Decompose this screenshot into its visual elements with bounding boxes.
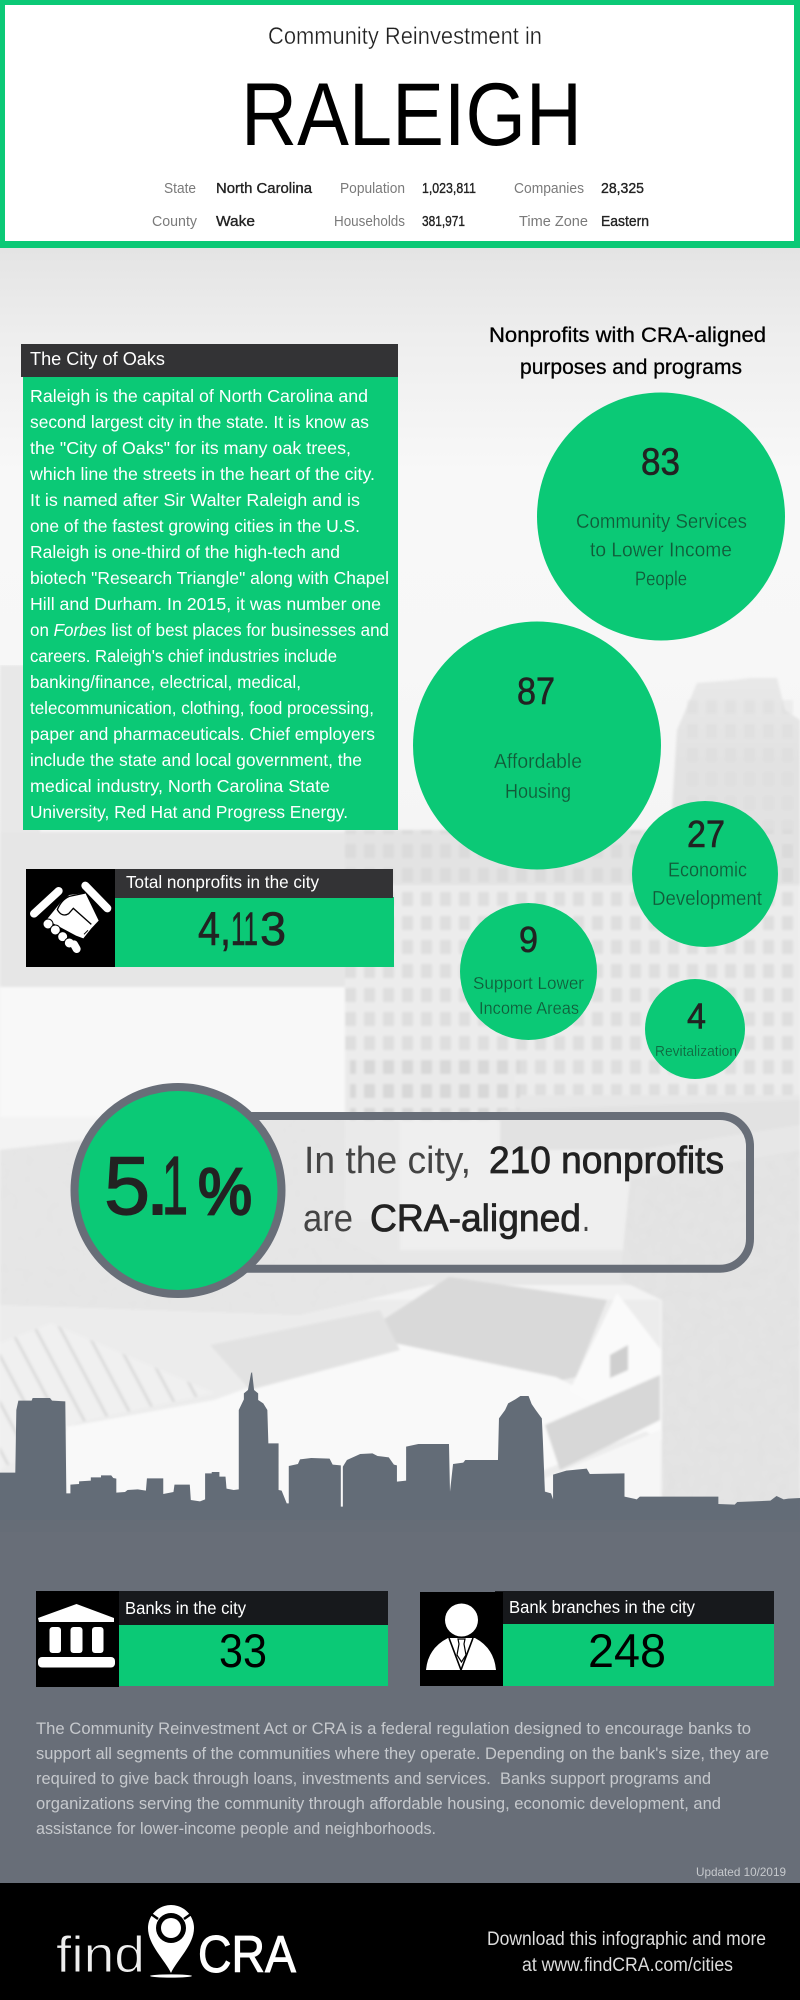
city description: include the state and local government, the	[30, 750, 362, 770]
city description: banking/finance, electrical, medical,	[30, 672, 301, 692]
stat: banks in the city	[36, 1591, 388, 1687]
header panel	[0, 0, 800, 248]
value: 4,113: 3	[260, 902, 286, 955]
icon: bank building	[36, 1591, 119, 1687]
cra explanation text: The Community Reinvestment Act or CRA is a federal regulation designed to encourage banks to	[36, 1719, 751, 1738]
stat: bank branches in the city: 248	[588, 1624, 666, 1677]
city description: second largest city in the state. It is know as	[30, 412, 369, 432]
city description: Raleigh is the capital of North Carolina and	[30, 386, 368, 406]
bubble: economic development: Development	[652, 887, 762, 910]
city facts: Population	[340, 180, 405, 197]
bubble: support lower income areas: Support Lower	[473, 973, 584, 993]
city description: which line the streets in the heart of the city.	[29, 464, 375, 484]
bubble: affordable housing: Housing	[505, 780, 571, 803]
callout: 5.1 percent cra-aligned: 210 nonprofits	[489, 1140, 724, 1182]
city description: on Forbes list of best places for businesses and	[30, 620, 389, 640]
city facts: 381,971	[422, 214, 465, 230]
stat: bank branches in the city	[420, 1591, 774, 1686]
title line: Community Reinvestment in	[268, 23, 542, 50]
city facts: Companies	[514, 180, 584, 197]
download note: Download this infographic and more	[487, 1929, 766, 1950]
logo: findCRA	[56, 1905, 296, 1984]
city description	[29, 386, 389, 822]
city facts: Eastern	[601, 214, 649, 230]
heading: nonprofits with cra-aligned purposes: purposes and programs	[520, 355, 742, 379]
city facts: Households	[334, 213, 405, 230]
city facts: State	[164, 180, 196, 197]
city facts: County	[152, 213, 197, 230]
heading: nonprofits with cra-aligned purposes	[489, 323, 766, 379]
city facts: 1,023,811	[422, 181, 476, 197]
bubble: revitalization	[645, 979, 745, 1079]
city facts: Wake	[216, 214, 255, 230]
city description: Raleigh is one-third of the high-tech and	[30, 542, 340, 562]
stat: banks in the city: Banks in the city	[125, 1598, 246, 1618]
value: 5.1%: 5	[104, 1139, 150, 1232]
cra explanation text: support all segments of the communities where they operate. Depending on the bank's size, they are	[36, 1744, 769, 1763]
city description: University, Red Hat and Progress Energy.	[30, 802, 348, 822]
value: 5.1%: %	[198, 1154, 252, 1228]
bubble: support lower income areas: 9	[519, 919, 538, 960]
bubble: economic development: 27	[687, 814, 725, 856]
callout: 5.1 percent cra-aligned	[74, 1087, 750, 1294]
cra explanation text	[36, 1719, 769, 1838]
city description: careers. Raleigh's chief industries include	[30, 646, 337, 666]
city facts: Time Zone	[519, 213, 588, 230]
city facts: North Carolina	[216, 181, 313, 197]
value: 4,113: 4,	[198, 902, 231, 955]
logo: findCRA: find	[56, 1926, 145, 1983]
stat: total nonprofits	[26, 869, 394, 967]
stat: banks in the city: 33	[219, 1624, 267, 1677]
city facts: 28,325	[601, 181, 644, 197]
icon: business person	[420, 1592, 503, 1686]
bubble: revitalization: 4	[687, 996, 706, 1036]
value: 5.1%: .	[146, 1139, 169, 1232]
cra explanation text: required to give back through loans, investments and services. Banks support programs and	[36, 1769, 711, 1788]
callout: 5.1 percent cra-aligned: In the city,	[304, 1140, 471, 1182]
callout: 5.1 percent cra-aligned: CRA-aligned	[370, 1198, 581, 1240]
city description: It is named after Sir Walter Raleigh and is	[30, 490, 360, 510]
footer	[0, 1883, 800, 2000]
value: 5.1%: 1	[162, 1139, 188, 1232]
icon: handshake	[26, 869, 115, 967]
bubble: economic development	[632, 801, 778, 947]
city name: RALEIGH	[241, 64, 582, 164]
bubble: community services: 83	[641, 442, 680, 484]
city description: Hill and Durham. In 2015, it was number one	[30, 594, 381, 614]
logo: findCRA: CRA	[198, 1926, 296, 1984]
city description: paper and pharmaceuticals. Chief employers	[30, 724, 375, 744]
callout: 5.1 percent cra-aligned: .	[582, 1198, 590, 1240]
city description: one of the fastest growing cities in the U.S.	[30, 516, 360, 536]
bubble: support lower income areas	[460, 903, 597, 1040]
city skyline silhouette and lower panel	[0, 1372, 800, 1883]
value: 4,113: 11	[231, 902, 258, 955]
value: 5.1%	[104, 1139, 252, 1232]
cra explanation text: organizations serving the community through affordable housing, economic development, and	[36, 1794, 721, 1813]
stat: bank branches in the city: Bank branches in the city	[509, 1597, 695, 1617]
icon: map pin	[148, 1905, 194, 1978]
city description: biotech "Research Triangle" along with Chapel	[30, 568, 389, 588]
bubble: revitalization: Revitalization	[655, 1044, 737, 1060]
bubble: community services: Community Services	[576, 510, 747, 533]
bubble: support lower income areas: Income Areas	[479, 998, 579, 1018]
download note	[487, 1929, 766, 1976]
background city photo	[0, 248, 800, 1530]
value: 4,113	[198, 902, 286, 955]
city description: medical industry, North Carolina State	[30, 776, 330, 796]
bubble: affordable housing	[413, 622, 661, 870]
bubble: community services: People	[635, 568, 687, 590]
city description: the "City of Oaks" for its many oak trees,	[30, 438, 351, 458]
panel: the city of oaks	[21, 344, 398, 830]
bubble: economic development: Economic	[668, 858, 747, 882]
updated date: Updated 10/2019	[696, 1865, 786, 1879]
panel: the city of oaks: The City of Oaks	[30, 348, 165, 369]
bubble: community services: to Lower Income	[590, 538, 732, 562]
stat: total nonprofits: Total nonprofits in the city	[126, 872, 319, 892]
callout: 5.1 percent cra-aligned: are	[303, 1198, 353, 1240]
bubble: affordable housing: Affordable	[494, 750, 582, 773]
city facts	[152, 180, 649, 230]
cra explanation text: assistance for lower-income people and neighborhoods.	[36, 1819, 436, 1838]
heading: nonprofits with cra-aligned purposes: Nonprofits with CRA-aligned	[489, 323, 766, 347]
bubble: affordable housing: 87	[517, 671, 555, 713]
city description: telecommunication, clothing, food processing,	[30, 698, 374, 718]
download note: at www.findCRA.com/cities	[522, 1955, 733, 1976]
bubble: community services	[537, 392, 785, 640]
